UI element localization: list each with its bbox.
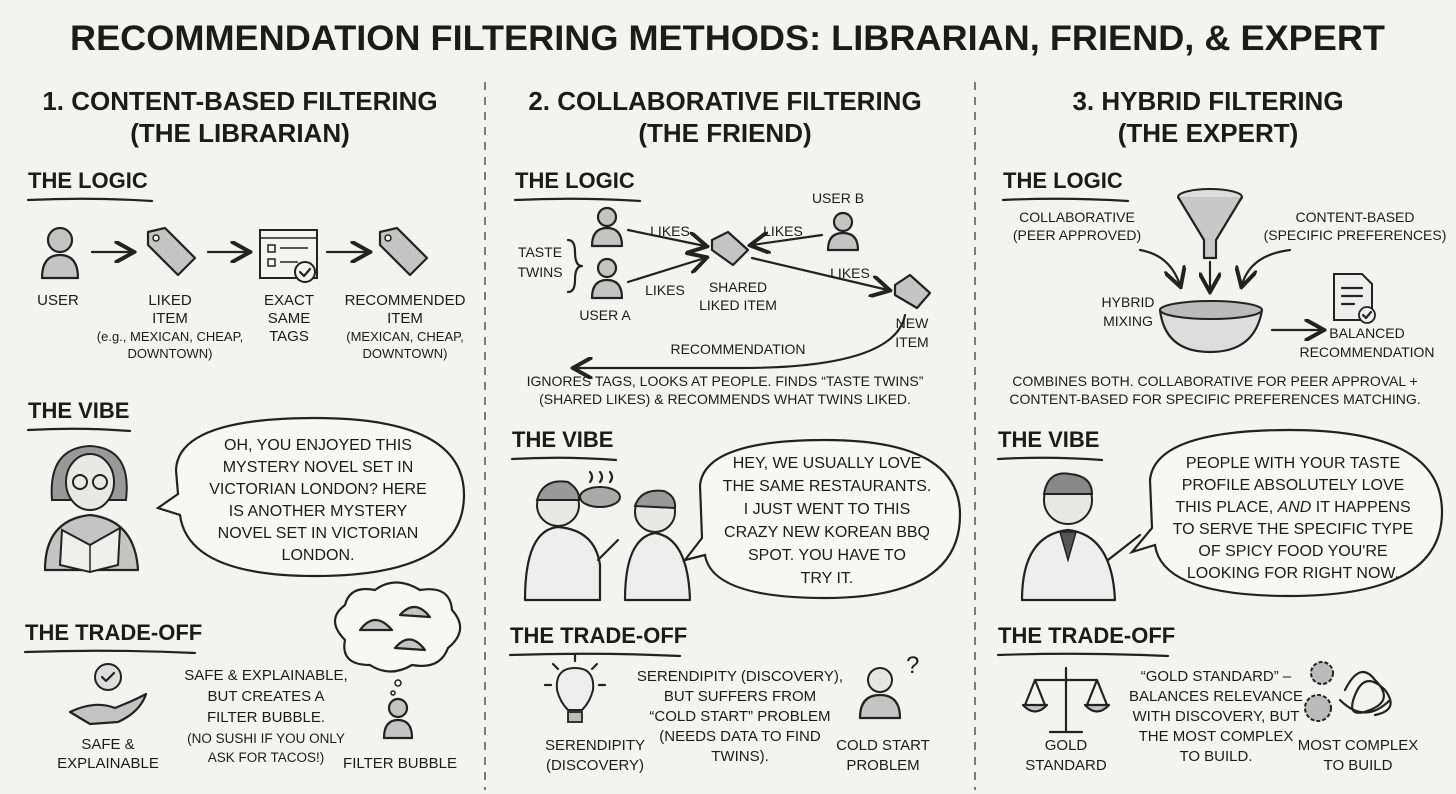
text: trade-off collaborative: (NEEDS DATA TO FIND [659, 728, 821, 745]
text: trade-off collaborative: TWINS). [711, 748, 769, 765]
heading: collaborative: 2. COLLABORATIVE FILTERING [528, 86, 922, 116]
text: trade-off hybrid: “GOLD STANDARD” – [1141, 668, 1292, 685]
logic diagram: collaborative: USER B [812, 190, 864, 206]
text: collaborative logic: IGNORES TAGS, LOOKS AT PEOPLE. FINDS “TASTE TWINS” [527, 373, 924, 389]
subheading: the trade-off: THE TRADE-OFF [998, 623, 1175, 648]
text: trade-off content-based: ASK FOR TACOS!) [208, 750, 324, 765]
logic diagram: hybrid: (SPECIFIC PREFERENCES) [1264, 227, 1446, 243]
icon: cold start: ? [906, 652, 919, 679]
text: trade-off content-based [184, 667, 348, 765]
logic diagram: hybrid: HYBRID [1102, 294, 1154, 310]
speech bubble: expert [1132, 430, 1442, 596]
heading: collaborative [528, 86, 922, 148]
subheading: the trade-off: THE TRADE-OFF [25, 620, 202, 645]
icon: filter bubble [335, 582, 460, 772]
logic diagram: collaborative: LIKES [650, 223, 690, 239]
logic diagram: hybrid: CONTENT-BASED [1295, 209, 1415, 225]
speech bubble: friend: SPOT. YOU HAVE TO [748, 547, 906, 564]
speech bubble: friend: THE SAME RESTAURANTS. [723, 478, 931, 495]
text: trade-off collaborative: “COLD START” PROBLEM [649, 708, 831, 725]
icon: safe hand: SAFE & [81, 736, 135, 753]
logic diagram: content-based: (e.g., MEXICAN, CHEAP, [97, 329, 243, 344]
speech bubble: expert: THIS PLACE, AND IT HAPPENS [1175, 499, 1411, 516]
icon: safe hand [57, 664, 159, 772]
speech bubble: librarian: MYSTERY NOVEL SET IN [223, 459, 413, 476]
text: trade-off content-based: (NO SUSHI IF YOU ONLY [187, 731, 345, 746]
logic diagram: hybrid: COLLABORATIVE [1019, 209, 1135, 225]
logic diagram: collaborative: USER A [579, 307, 631, 323]
icon: cold start: PROBLEM [846, 757, 920, 774]
text: trade-off hybrid [1129, 668, 1303, 765]
text: collaborative logic [527, 373, 924, 407]
logic diagram: hybrid: BALANCED [1329, 325, 1405, 341]
subheading: the vibe: THE VIBE [998, 427, 1099, 452]
speech bubble: friend [685, 440, 960, 598]
text: trade-off collaborative [637, 668, 843, 765]
icon: complex gears [1298, 662, 1418, 774]
speech bubble: librarian: LONDON. [282, 547, 354, 564]
subheading: the vibe: THE VIBE [28, 398, 129, 423]
logic diagram: hybrid: MIXING [1103, 313, 1153, 329]
icon: scale: STANDARD [1025, 757, 1107, 774]
subheading: the logic: THE LOGIC [1003, 168, 1123, 193]
logic diagram: collaborative: LIKES [645, 282, 685, 298]
icon: complex gears: MOST COMPLEX [1298, 737, 1418, 754]
text: trade-off collaborative: SERENDIPITY (DISCOVERY), [637, 668, 843, 685]
speech bubble: friend: TRY IT. [801, 570, 853, 587]
speech bubble: librarian: OH, YOU ENJOYED THIS [224, 437, 412, 454]
text: hybrid logic [1009, 373, 1421, 407]
logic diagram: content-based: SAME [268, 310, 310, 327]
icon: cold start [836, 652, 930, 774]
heading: hybrid: 3. HYBRID FILTERING [1072, 86, 1344, 116]
logic diagram: collaborative: TASTE [518, 244, 562, 260]
logic diagram: collaborative: NEW [896, 315, 929, 331]
logic diagram: collaborative [517, 190, 930, 368]
text: hybrid logic: COMBINES BOTH. COLLABORATIVE FOR PEER APPROVAL + [1012, 373, 1418, 389]
logic diagram: content-based: DOWNTOWN) [363, 346, 447, 361]
panel: content-based filtering [25, 86, 466, 772]
speech bubble: expert: OF SPICY FOOD YOU'RE [1198, 543, 1388, 560]
subheading: the trade-off: THE TRADE-OFF [510, 623, 687, 648]
speech bubble: expert: PROFILE ABSOLUTELY LOVE [1182, 477, 1404, 494]
logic diagram: hybrid: (PEER APPROVED) [1013, 227, 1141, 243]
logic diagram: collaborative: TWINS [517, 264, 563, 280]
heading: hybrid: (THE EXPERT) [1118, 118, 1298, 148]
logic diagram: collaborative: LIKED ITEM [699, 297, 777, 313]
text: hybrid logic: CONTENT-BASED FOR SPECIFIC PREFERENCES MATCHING. [1009, 391, 1421, 407]
icon: complex gears: TO BUILD [1324, 757, 1393, 774]
text: trade-off content-based: FILTER BUBBLE. [207, 709, 325, 726]
icon: scale [1023, 668, 1109, 774]
logic diagram: collaborative: LIKES [763, 223, 803, 239]
icon: light bulb: SERENDIPITY [545, 737, 645, 754]
heading: content-based: (THE LIBRARIAN) [130, 118, 350, 148]
subheading: the vibe: THE VIBE [512, 427, 613, 452]
logic diagram: content-based: USER [37, 292, 79, 309]
logic diagram: content-based: EXACT [264, 292, 314, 309]
panel: hybrid filtering [998, 86, 1446, 774]
logic diagram: content-based [37, 228, 466, 361]
logic diagram: content-based: ITEM [387, 310, 423, 327]
text: trade-off content-based: SAFE & EXPLAINABLE, [184, 667, 348, 684]
speech bubble: librarian: VICTORIAN LONDON? HERE [209, 481, 427, 498]
heading: content-based [42, 86, 438, 148]
speech bubble: friend: HEY, WE USUALLY LOVE [733, 455, 921, 472]
speech bubble: librarian: IS ANOTHER MYSTERY [229, 503, 408, 520]
panel: collaborative filtering [510, 86, 960, 774]
text: trade-off hybrid: WITH DISCOVERY, BUT [1133, 708, 1299, 725]
speech bubble: expert: PEOPLE WITH YOUR TASTE [1186, 455, 1400, 472]
speech bubble: librarian: NOVEL SET IN VICTORIAN [218, 525, 418, 542]
logic diagram: content-based: LIKED [148, 292, 192, 309]
logic diagram: collaborative: LIKES [830, 265, 870, 281]
logic diagram: collaborative: ITEM [895, 334, 929, 350]
subheading: the logic: THE LOGIC [28, 168, 148, 193]
icon: scale: GOLD [1045, 737, 1087, 754]
figure: two friends [525, 472, 690, 600]
icon: cold start: COLD START [836, 737, 930, 754]
logic diagram: collaborative: SHARED [709, 279, 767, 295]
text: trade-off hybrid: THE MOST COMPLEX [1139, 728, 1293, 745]
logic diagram: collaborative: RECOMMENDATION [670, 341, 806, 357]
text: trade-off hybrid: BALANCES RELEVANCE [1129, 688, 1303, 705]
icon: light bulb: (DISCOVERY) [546, 757, 644, 774]
logic diagram: content-based: DOWNTOWN) [128, 346, 212, 361]
logic diagram: content-based: TAGS [269, 328, 309, 345]
text: trade-off collaborative: BUT SUFFERS FROM [664, 688, 816, 705]
figure: expert [1022, 473, 1140, 600]
icon: safe hand: EXPLAINABLE [57, 755, 159, 772]
logic diagram: hybrid: RECOMMENDATION [1299, 344, 1435, 360]
logic diagram: hybrid [1013, 189, 1446, 360]
subheading: the logic: THE LOGIC [515, 168, 635, 193]
speech bubble: expert: TO SERVE THE SPECIFIC TYPE [1173, 521, 1413, 538]
speech bubble: librarian [158, 418, 464, 576]
speech bubble: expert: LOOKING FOR RIGHT NOW. [1187, 565, 1399, 582]
text: collaborative logic: (SHARED LIKES) & RECOMMENDS WHAT TWINS LIKED. [539, 391, 911, 407]
text: trade-off content-based: BUT CREATES A [208, 688, 324, 705]
text: trade-off hybrid: TO BUILD. [1179, 748, 1253, 765]
heading: content-based: 1. CONTENT-BASED FILTERING [42, 86, 438, 116]
logic diagram: content-based: (MEXICAN, CHEAP, [346, 329, 464, 344]
speech bubble: friend: CRAZY NEW KOREAN BBQ [724, 524, 930, 541]
figure: librarian [45, 446, 138, 572]
speech bubble: friend: I JUST WENT TO THIS [744, 501, 910, 518]
title: RECOMMENDATION FILTERING METHODS: LIBRARIAN, FRIEND, & EXPERT [70, 19, 1385, 58]
logic diagram: content-based: ITEM [152, 310, 188, 327]
icon: light bulb [545, 655, 645, 774]
heading: collaborative: (THE FRIEND) [638, 118, 812, 148]
icon: filter bubble: FILTER BUBBLE [343, 755, 457, 772]
logic diagram: content-based: RECOMMENDED [345, 292, 466, 309]
heading: hybrid [1072, 86, 1344, 148]
